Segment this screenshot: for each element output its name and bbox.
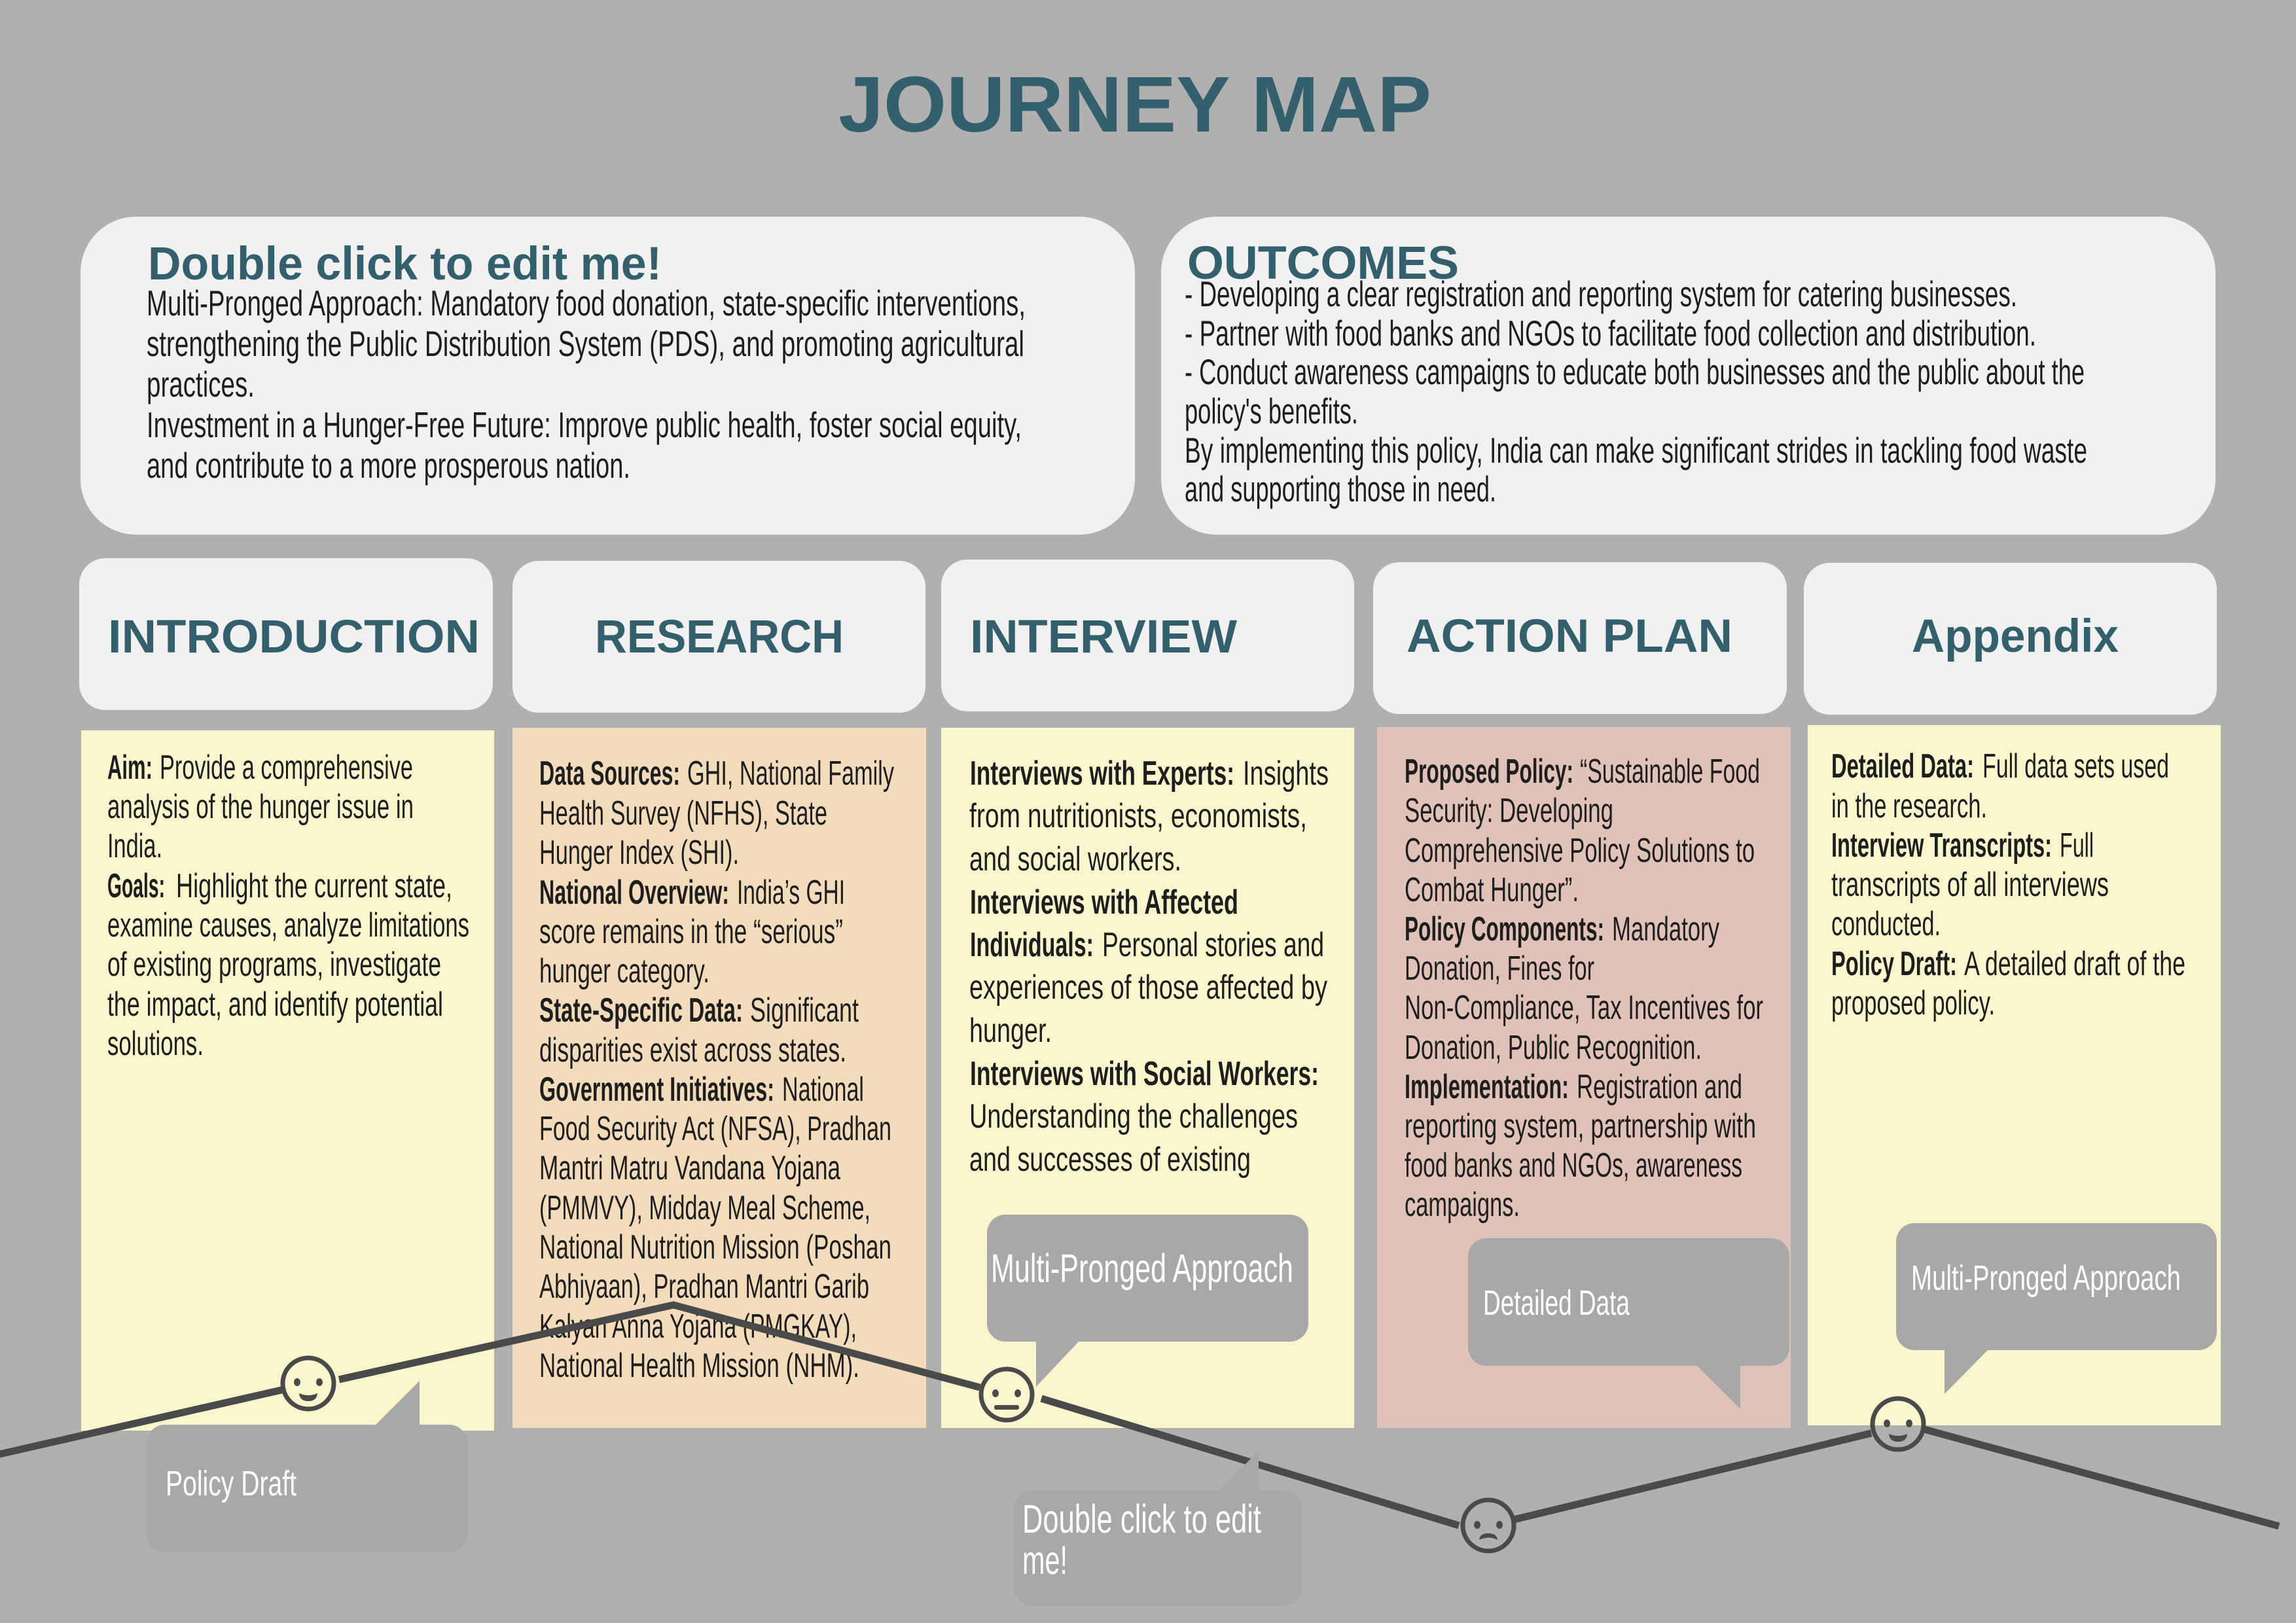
column: research: Data Sources:: [539, 755, 680, 793]
column: research: GHI, National Family: [687, 755, 894, 793]
callout: multi-pronged approach, interview: [987, 1215, 1308, 1387]
column: introduction: Highlight the current state,: [176, 867, 452, 905]
column: action plan: Proposed Policy:: [1405, 753, 1573, 791]
icon: happy face 1: [283, 1358, 334, 1409]
column: interview: Insights: [1243, 755, 1329, 793]
callout: multi-pronged approach, appendix: [1896, 1223, 2217, 1394]
column: introduction: Provide a comprehensive: [160, 749, 413, 787]
column: action plan: Non-Compliance, Tax Incentives for: [1405, 989, 1763, 1027]
icon: happy face 2: [1873, 1399, 1924, 1450]
column: appendix: Full data sets used: [1982, 747, 2169, 785]
column: introduction: India.: [107, 827, 162, 865]
header: appendix: [1804, 563, 2217, 715]
column: action plan: Combat Hunger”.: [1405, 871, 1579, 909]
header: action plan: ACTION PLAN: [1407, 611, 1732, 662]
panel heading: Double click to edit me!: [148, 238, 662, 290]
callout: double click: me!: [1022, 1538, 1067, 1582]
panel text: Investment in a Hunger-Free Future: Improve public health, foster social equity,: [147, 404, 1022, 445]
outcomes heading: OUTCOMES: [1187, 238, 1459, 289]
column: introduction: [81, 730, 494, 1431]
panel: outcomes: [1161, 217, 2215, 535]
outcomes text: [1185, 274, 2087, 509]
column: appendix: [1808, 725, 2221, 1425]
column: action plan: Policy Components:: [1405, 910, 1604, 948]
column: introduction: analysis of the hunger issue in: [107, 788, 414, 826]
column: research: Food Security Act (NFSA), Pradhan: [539, 1110, 891, 1148]
header: research: RESEARCH: [595, 611, 844, 663]
column: action plan: food banks and NGOs, awareness: [1405, 1147, 1742, 1185]
column: research: Kalyan Anna Yojana (PMGKAY),: [539, 1308, 857, 1346]
column: interview: Interviews with Affected: [970, 883, 1238, 921]
column: action plan: campaigns.: [1405, 1186, 1520, 1224]
callout: policy draft: [147, 1381, 467, 1552]
callout: detailed data: Detailed Data: [1483, 1283, 1630, 1323]
column: appendix: A detailed draft of the: [1964, 945, 2185, 983]
column: research: score remains in the “serious”: [539, 913, 843, 951]
column: research: Significant: [750, 991, 859, 1029]
title: JOURNEY MAP: [838, 60, 1431, 149]
column: action plan: Registration and: [1577, 1068, 1742, 1106]
column: research: Hunger Index (SHI).: [539, 834, 739, 872]
column: research: National Nutrition Mission (Poshan: [539, 1228, 891, 1266]
column: research: Abhiyaan), Pradhan Mantri Garib: [539, 1268, 869, 1306]
column: introduction: Goals:: [107, 867, 165, 905]
column: research: State-Specific Data:: [539, 991, 743, 1029]
column: appendix: transcripts of all interviews: [1831, 866, 2109, 904]
column: interview: and successes of existing: [969, 1141, 1251, 1179]
column: action plan: Implementation:: [1405, 1068, 1569, 1106]
column: appendix: proposed policy.: [1831, 984, 1995, 1022]
column: research: hunger category.: [539, 952, 709, 990]
header: interview: INTERVIEW: [970, 611, 1237, 663]
column: interview: hunger.: [969, 1012, 1052, 1050]
column: action plan: reporting system, partnership with: [1405, 1107, 1756, 1145]
column: research: Health Survey (NFHS), State: [539, 794, 827, 832]
column: interview: Personal stories and: [1102, 926, 1324, 964]
column: interview: and social workers.: [969, 840, 1181, 878]
column: appendix: Detailed Data:: [1831, 747, 1974, 785]
column: research: disparities exist across states.: [539, 1031, 846, 1069]
header: action plan: [1373, 562, 1787, 714]
callout: detailed data: [1468, 1238, 1789, 1409]
panel: double click summary: [81, 217, 1135, 535]
column: research: National: [782, 1071, 864, 1109]
column: action plan: Mandatory: [1612, 910, 1719, 948]
column: appendix: Interview Transcripts:: [1831, 827, 2052, 865]
header: research: [512, 561, 925, 713]
column: interview: experiences of those affected by: [969, 969, 1327, 1007]
column: research: National Health Mission (NHM).: [539, 1347, 859, 1385]
column: interview: Individuals:: [970, 926, 1094, 964]
icon: sad face: [1463, 1500, 1514, 1551]
header: appendix: Appendix: [1912, 611, 2119, 662]
column: research: Mantri Matru Vandana Yojana: [539, 1149, 840, 1187]
callout: double click: [1014, 1451, 1302, 1605]
column: action plan: “Sustainable Food: [1580, 753, 1760, 791]
outcomes text: and supporting those in need.: [1185, 469, 1496, 509]
column: interview: Understanding the challenges: [969, 1097, 1298, 1135]
column: appendix: conducted.: [1831, 905, 1941, 943]
journey line: [0, 1305, 2279, 1526]
header: interview: [941, 560, 1354, 711]
column: action plan: [1377, 727, 1791, 1428]
callout: multi-pronged approach, appendix: Multi-Pronged Approach: [1911, 1258, 2181, 1298]
column: introduction: Aim:: [107, 749, 152, 787]
panel text: practices.: [147, 364, 255, 404]
column: research: Government Initiatives:: [539, 1071, 774, 1109]
icon: neutral face: [981, 1369, 1032, 1420]
column: introduction: examine causes, analyze limitations: [107, 906, 469, 944]
column: action plan: Donation, Public Recognition.: [1405, 1029, 1702, 1067]
column: research: (PMMVY), Midday Meal Scheme,: [539, 1189, 870, 1227]
header: introduction: INTRODUCTION: [108, 611, 480, 663]
header: introduction: [79, 558, 493, 710]
outcomes text: policy's benefits.: [1185, 391, 1358, 431]
column: introduction: the impact, and identify potential: [107, 986, 443, 1024]
column: interview: [941, 728, 1354, 1428]
column: action plan: Comprehensive Policy Solutions to: [1405, 832, 1755, 870]
column: action plan: Donation, Fines for: [1405, 950, 1594, 988]
column: action plan: Security: Developing: [1405, 792, 1613, 830]
panel text: Multi-Pronged Approach: Mandatory food donation, state-specific interventions,: [147, 283, 1026, 323]
column: research: India’s GHI: [737, 874, 845, 912]
column: research: [512, 728, 926, 1428]
column: introduction: solutions.: [107, 1025, 204, 1063]
column: appendix: Full: [2060, 827, 2094, 865]
column: appendix: Policy Draft:: [1831, 945, 1957, 983]
panel text: [147, 283, 1026, 486]
column: interview: from nutritionists, economists,: [969, 797, 1307, 835]
column: interview: Interviews with Experts:: [970, 755, 1234, 793]
panel text: and contribute to a more prosperous nation.: [147, 445, 630, 486]
callout: policy draft: Policy Draft: [166, 1464, 296, 1503]
column: research: National Overview:: [539, 874, 729, 912]
callout: double click: Double click to edit: [1022, 1497, 1261, 1541]
callout: multi-pronged approach, interview: Multi-Pronged Approach: [991, 1246, 1293, 1291]
panel text: strengthening the Public Distribution System (PDS), and promoting agricultural: [147, 323, 1024, 364]
column: appendix: in the research.: [1831, 787, 1987, 825]
column: introduction: of existing programs, investigate: [107, 946, 441, 984]
column: interview: Interviews with Social Workers:: [970, 1055, 1319, 1093]
